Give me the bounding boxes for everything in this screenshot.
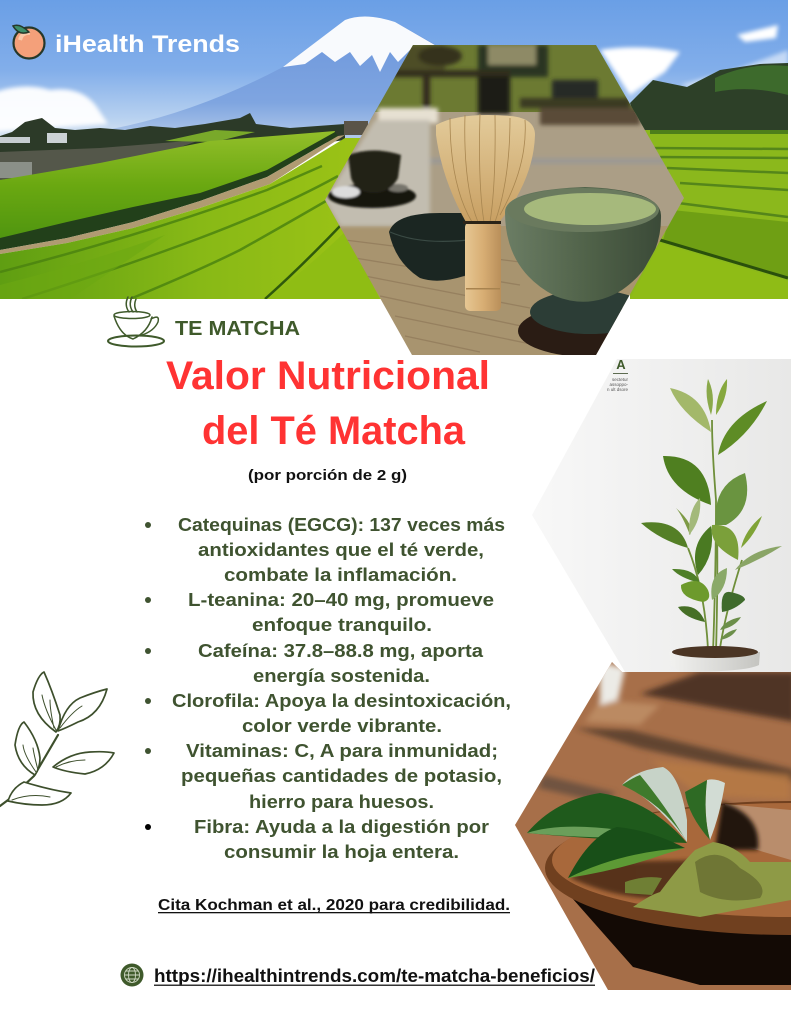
title: Valor Nutricional [166, 354, 490, 398]
tiny stray label: assoppo- [609, 382, 628, 387]
icon: tea cup [108, 297, 164, 346]
mountain [100, 16, 445, 140]
right rows [630, 130, 788, 299]
wood grain [538, 662, 791, 802]
panel: tea field landscape photo [0, 0, 788, 299]
section label: TE MATCHA [175, 317, 300, 340]
logo text: iHealth Trends [55, 31, 240, 58]
tiny stray label: n ult dsore [607, 387, 628, 392]
list text: color verde vibrante. [242, 716, 442, 736]
clouds [0, 25, 788, 132]
decorative leaf sprig illustration [0, 672, 114, 806]
icon: globe [120, 964, 144, 986]
far bowl [328, 150, 416, 208]
mat stripes [347, 240, 530, 352]
list text: pequeñas cantidades de potasio, [181, 766, 502, 786]
tiny stray label: sectetur [612, 377, 628, 382]
list text: enfoque tranquilo. [252, 615, 432, 635]
list text: Vitaminas: C, A para inmunidad; [186, 741, 498, 761]
whisk [436, 114, 535, 311]
tiny stray label: A [616, 357, 626, 372]
list text: consumir la hoja entera. [224, 842, 459, 862]
panel: matcha powder hexagon photo [510, 660, 791, 995]
list text: L-teanina: 20–40 mg, promueve [188, 590, 494, 610]
pot [690, 652, 760, 672]
citation: Cita Kochman et al., 2020 para credibilidad. [158, 897, 510, 914]
small dark bowl [389, 213, 470, 281]
panel: tea plant hexagon photo [530, 359, 791, 672]
list text: Cafeína: 37.8–88.8 mg, aporta [198, 641, 484, 661]
bullets [145, 522, 151, 830]
blurred room furniture [325, 45, 670, 226]
plant [641, 379, 782, 672]
subtitle: (por porción de 2 g) [248, 467, 407, 484]
title [166, 354, 490, 453]
list text: energía sostenida. [253, 666, 430, 686]
title: del Té Matcha [202, 409, 466, 453]
tree line [0, 113, 368, 182]
tiny stray label [607, 357, 628, 392]
list text: Clorofila: Apoya la desintoxicación, [172, 691, 511, 711]
hedge [0, 132, 338, 250]
logo: peach icon [13, 25, 44, 58]
front rows [0, 138, 400, 299]
leaves [527, 767, 725, 878]
large bowl saucer [518, 308, 622, 355]
shadow under plate [572, 898, 791, 985]
list text [172, 515, 511, 862]
panel: matcha set hexagon photo [320, 45, 690, 361]
list text: Fibra: Ayuda a la digestión por [194, 817, 489, 837]
list text: antioxidantes que el té verde, [198, 540, 484, 560]
matcha powder [625, 842, 791, 917]
plate [545, 801, 791, 935]
whisk handle [465, 222, 501, 311]
list text: hierro para huesos. [249, 792, 434, 812]
list text: Catequinas (EGCG): 137 veces más [178, 515, 505, 535]
large green bowl [505, 187, 661, 302]
list text: combate la inflamación. [224, 565, 457, 585]
tan path [0, 135, 345, 254]
back field [0, 131, 335, 240]
bullet list [145, 515, 511, 862]
right hill [630, 63, 788, 132]
website link: https://ihealthintrends.com/te-matcha-beneficios/ [154, 966, 595, 986]
